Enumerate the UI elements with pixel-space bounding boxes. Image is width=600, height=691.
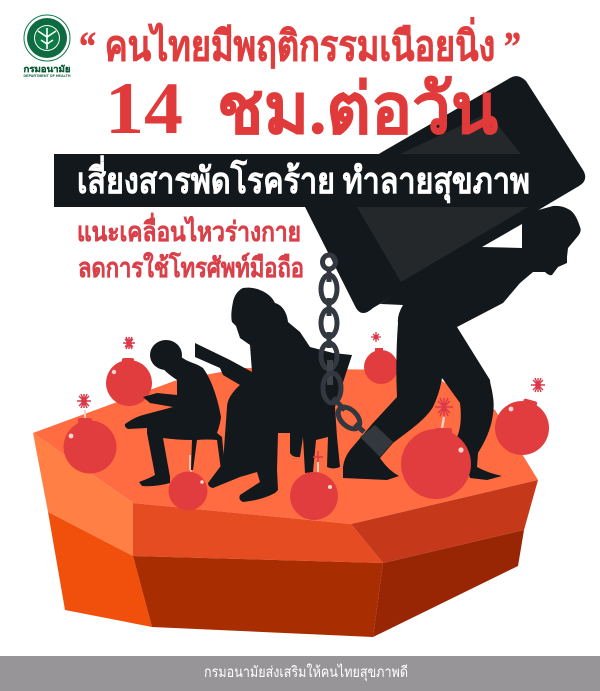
headline: 14 hours per day: ชม.ต่อวัน (217, 72, 498, 149)
phone: large smartphone on man's back (301, 76, 585, 313)
chain: links down to ankle (321, 255, 364, 433)
man: silhouette carrying phone (343, 206, 581, 480)
headline: 14 hours per day (105, 68, 498, 150)
logo: department of health (24, 15, 71, 78)
bomb: large in front (401, 398, 471, 499)
advice text: ลดการใช้โทรศัพท์มือถือ (78, 251, 304, 283)
advice text: แนะเคลื่อนไหวร่างกาย (77, 212, 301, 247)
advice text (77, 212, 304, 283)
footer bar: กรมอนามัยส่งเสริมให้คนไทยสุขภาพดี (204, 663, 408, 682)
banner: black strip with warning: เสี่ยงสารพัดโรคร้าย ทำลายสุขภาพ (77, 155, 530, 204)
bomb: right upper, behind figures (364, 332, 398, 384)
ankle cuff (360, 425, 393, 457)
headline: 14 hours per day: 14 (105, 68, 183, 150)
bomb: lower centre (290, 451, 338, 520)
banner: black strip with warning (54, 154, 544, 207)
bomb: lower centre-left (168, 455, 208, 510)
bomb: far right (495, 378, 549, 455)
title: opening quote and headline: “ คนไทยมีพฤติกรรมเนือยนิ่ง ” (79, 17, 521, 69)
bomb: far left (64, 394, 116, 474)
gap between phone and man's back (482, 224, 522, 248)
logo: department of health: กรมอนามัย (24, 64, 70, 74)
woman: seated silhouette reading a book (195, 288, 352, 502)
platform: orange polygon block (33, 368, 538, 637)
bomb: upper left (106, 337, 152, 406)
logo: department of health: DEPARTMENT OF HEALTH (24, 73, 71, 78)
footer bar (0, 656, 600, 691)
boy: seated silhouette using a phone (125, 340, 225, 486)
